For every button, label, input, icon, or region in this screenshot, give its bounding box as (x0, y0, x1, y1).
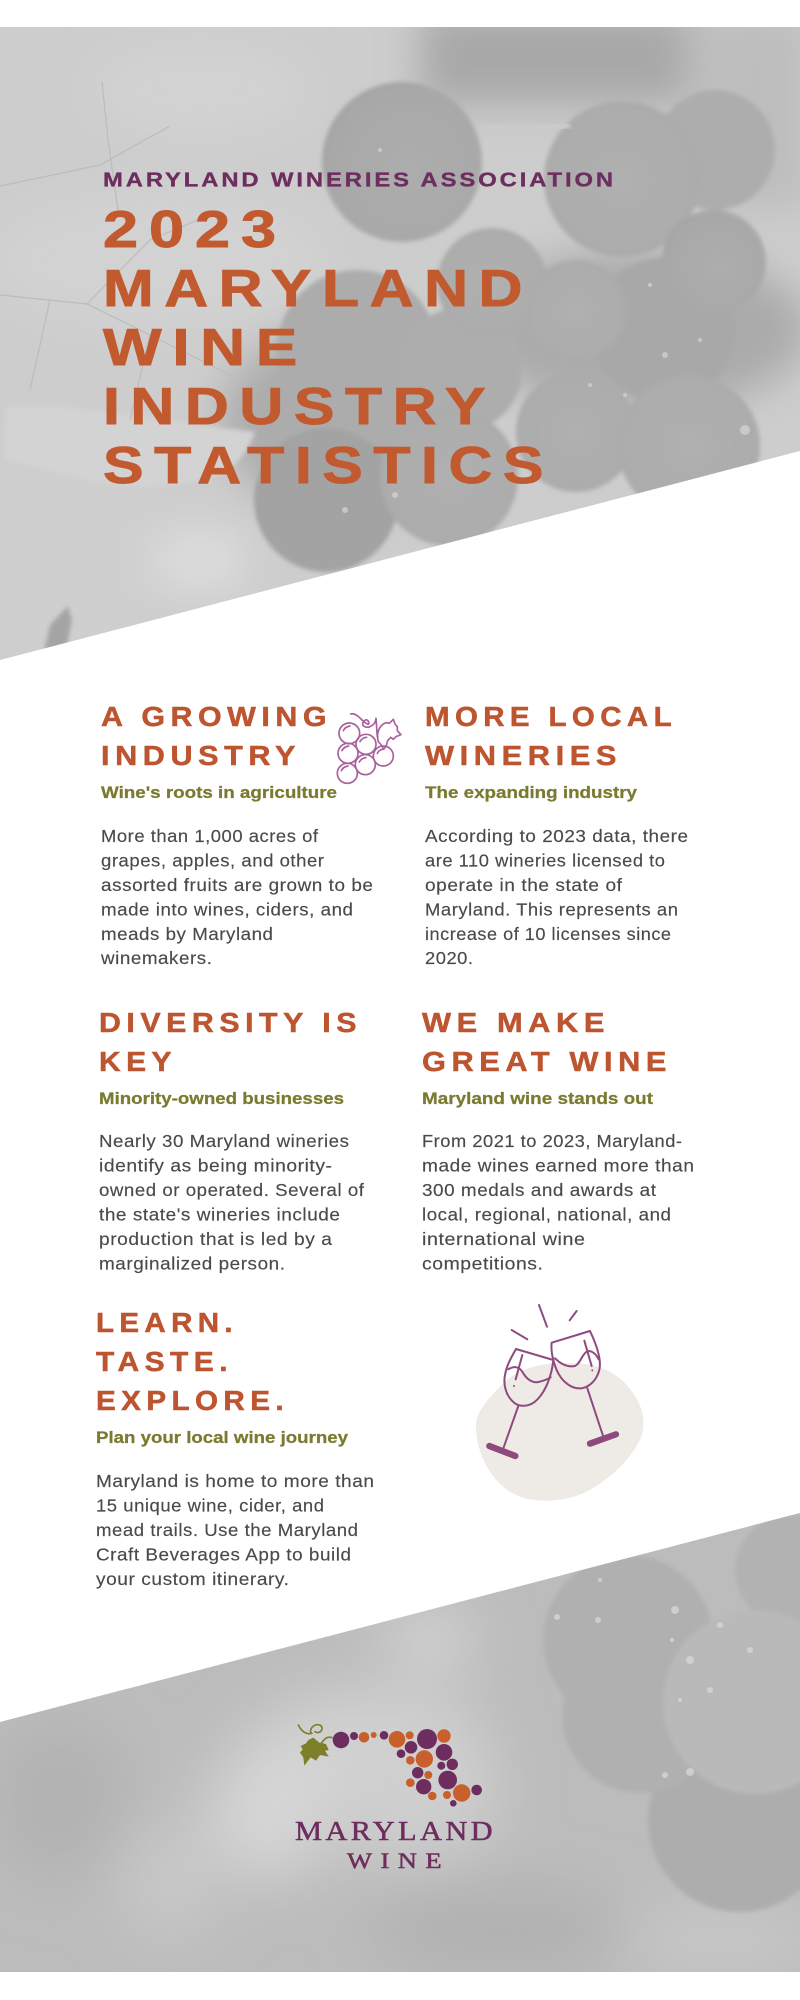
body text: identify as being minority- (99, 1156, 332, 1176)
body text: 15 unique wine, cider, and (96, 1496, 324, 1516)
heading: DIVERSITY IS (99, 1007, 362, 1038)
panel: header grape photo background (0, 10, 800, 667)
subheading: Plan your local wine journey (96, 1429, 349, 1447)
leaf veins (0, 82, 240, 420)
body text: meads by Maryland (101, 924, 274, 944)
body text (99, 1131, 364, 1274)
logo wordmark: WINE (347, 1848, 450, 1873)
heading: WINERIES (425, 740, 622, 771)
body text: local, regional, national, and (422, 1204, 672, 1224)
body text: 2020. (425, 948, 474, 968)
title: WINE (103, 319, 308, 377)
heading: KEY (99, 1046, 177, 1077)
vine leaf (298, 1725, 332, 1766)
body text: winemakers. (100, 948, 212, 968)
body text (96, 1471, 374, 1589)
body text: production that is led by a (99, 1229, 332, 1249)
subheading: Minority-owned businesses (99, 1090, 344, 1108)
subheading: The expanding industry (425, 784, 638, 802)
body text: made wines earned more than (422, 1156, 694, 1176)
heading: TASTE. (96, 1346, 233, 1377)
body text: According to 2023 data, there (425, 826, 688, 846)
heading: GREAT WINE (422, 1046, 672, 1077)
body text: your custom itinerary. (96, 1569, 290, 1589)
heading: WE MAKE (422, 1007, 610, 1038)
body text (425, 826, 688, 968)
title: MARYLAND (103, 260, 533, 318)
body text: the state's wineries include (99, 1204, 340, 1224)
body text: assorted fruits are grown to be (101, 875, 374, 895)
orange grapes (359, 1729, 470, 1802)
body text: Maryland. This represents an (425, 900, 678, 920)
title: INDUSTRY (103, 378, 496, 436)
heading: MORE LOCAL (425, 701, 677, 732)
body text: From 2021 to 2023, Maryland- (422, 1131, 682, 1151)
body text: made into wines, ciders, and (101, 900, 354, 920)
body text: increase of 10 licenses since (425, 924, 672, 944)
body text: 300 medals and awards at (422, 1180, 656, 1200)
body text: are 110 wineries licensed to (425, 850, 666, 870)
panel: more local wineries (425, 701, 688, 968)
glasses line art (489, 1305, 616, 1456)
body text: mead trails. Use the Maryland (96, 1520, 358, 1540)
heading: EXPLORE. (96, 1385, 289, 1416)
logo mark: vine and grape map of Maryland (298, 1725, 482, 1807)
water drops (554, 1578, 753, 1778)
heading (99, 1007, 362, 1077)
body text: international wine (422, 1229, 586, 1249)
heading: INDUSTRY (101, 740, 301, 771)
water drops (342, 148, 750, 513)
body text: More than 1,000 acres of (101, 826, 318, 846)
icon: grape bunch (337, 714, 401, 783)
title: 2023 (103, 201, 287, 259)
heading (425, 701, 677, 771)
footer grapes (543, 1515, 800, 1912)
heading: A GROWING (101, 701, 332, 732)
body text: Nearly 30 Maryland wineries (99, 1131, 350, 1151)
grape cluster (254, 82, 775, 572)
beige blob (476, 1363, 643, 1501)
body text: Maryland is home to more than (96, 1471, 374, 1491)
body text: marginalized person. (99, 1254, 286, 1274)
logo wordmark: MARYLAND (295, 1816, 496, 1846)
eyebrow: Maryland Wineries Association: MARYLAND WINERIES ASSOCIATION (103, 168, 616, 192)
grape stem (562, 124, 572, 129)
purple grapes (333, 1729, 482, 1807)
panel: a growing industry (100, 701, 374, 968)
body text (422, 1131, 694, 1274)
subheading: Wine's roots in agriculture (101, 784, 337, 802)
title: STATISTICS (103, 437, 554, 495)
heading (96, 1307, 289, 1416)
body text: Craft Beverages App to build (96, 1544, 352, 1564)
heading (422, 1007, 672, 1077)
logo wordmark (295, 1816, 496, 1873)
panel: diversity is key (99, 1007, 364, 1274)
panel: we make great wine (422, 1007, 694, 1274)
body text: owned or operated. Several of (99, 1180, 364, 1200)
leaf lobe lower left (193, 426, 256, 468)
heading: LEARN. (96, 1307, 238, 1338)
panel: learn taste explore (96, 1307, 374, 1589)
panel: footer grape photo background (0, 1500, 800, 1980)
dark shadow patch (44, 606, 72, 652)
body text: grapes, apples, and other (101, 850, 324, 870)
body text: competitions. (422, 1254, 544, 1274)
body text: operate in the state of (425, 875, 622, 895)
body text (100, 826, 374, 968)
logo: Maryland Wine (295, 1725, 496, 1873)
title (103, 201, 554, 495)
heading (101, 701, 332, 771)
subheading: Maryland wine stands out (422, 1090, 654, 1108)
icon: clinking wine glasses (476, 1305, 643, 1501)
